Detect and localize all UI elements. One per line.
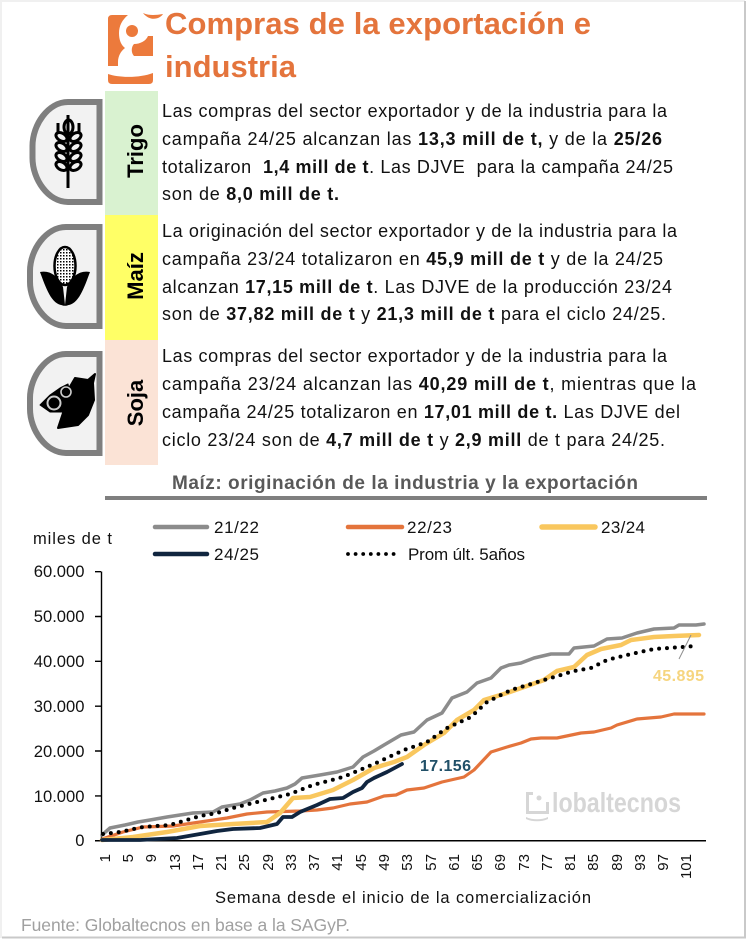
text: soja: campaña 24/25 totalizaron en 17,01 mill de t. Las DJVE del: [162, 402, 680, 422]
panel: trigo: [32, 91, 673, 215]
series: 23/24: [102, 635, 699, 840]
y axis: 10.000: [34, 787, 84, 806]
data label: 45.895: 45.895: [653, 668, 704, 685]
x axis: 73: [516, 854, 533, 871]
x axis: 85: [585, 854, 602, 871]
logo: Globaltecnos g: [108, 13, 163, 84]
x axis: 77: [539, 854, 556, 871]
data label: 45.895: [653, 635, 704, 685]
y axis: 60.000: [34, 562, 84, 581]
label: Maíz: [105, 215, 158, 340]
series: 22/23: [102, 714, 704, 839]
label: Soja: Soja: [123, 379, 148, 426]
chart legend: 22/23: [407, 518, 452, 537]
x axis: [95, 841, 706, 879]
y axis: 0: [75, 831, 84, 850]
x axis: 29: [260, 854, 277, 871]
x axis: 45: [353, 854, 370, 871]
series: promedio 5 años: [103, 646, 696, 834]
y axis: 50.000: [34, 607, 84, 626]
x axis: 61: [446, 854, 463, 871]
chart legend: 23/24: [601, 518, 645, 537]
label: Maíz: Maíz: [123, 252, 148, 300]
label: Soja: [105, 340, 158, 465]
x axis: 53: [399, 854, 416, 871]
x axis: 41: [329, 854, 346, 871]
x axis: 33: [283, 854, 300, 871]
text: soja: campaña 23/24 alcanzan las 40,29 mill de t, mientras que la: [162, 374, 697, 394]
icon: soybean: [30, 354, 100, 453]
y axis: 40.000: [34, 652, 84, 671]
y axis unit: miles de t: [33, 530, 112, 548]
y axis: 30.000: [34, 697, 84, 716]
chart heading: Maíz: originación de la industria y la exportación: [172, 473, 638, 494]
x axis: 25: [236, 854, 253, 871]
x axis: 37: [306, 854, 323, 871]
icon: wheat: [32, 102, 100, 202]
text: maiz: campaña 23/24 totalizaron en 45,9 mill de t y de la 24/25: [162, 249, 663, 269]
data label: 17.156: 17.156: [420, 758, 471, 775]
panel: maiz: [30, 215, 678, 340]
chart legend: 21/22: [214, 518, 259, 537]
series: 21/22: [102, 624, 704, 835]
x axis: 57: [423, 854, 440, 871]
title: [165, 6, 591, 84]
x axis: 93: [632, 854, 649, 871]
text: soja: [162, 346, 697, 450]
text: soja: ciclo 23/24 son de 4,7 mill de t y 2,9 mill de t para 24/25.: [162, 430, 665, 450]
x axis: 13: [167, 854, 184, 871]
text: trigo: son de 8,0 mill de t.: [162, 184, 339, 204]
text: trigo: totalizaron 1,4 mill de t. Las DJVE para la campaña 24/25: [162, 157, 673, 177]
watermark: lobaltecnos: [552, 787, 681, 818]
text: soja: Las compras del sector exportador y de la industria para la: [162, 346, 668, 366]
x axis: 17: [190, 854, 207, 871]
chart legend: [155, 518, 645, 564]
x axis: 101: [678, 854, 695, 879]
text: trigo: campaña 24/25 alcanzan las 13,3 mill de t, y de la 25/26: [162, 129, 662, 149]
x axis: 49: [376, 854, 393, 871]
title: Compras de la exportación e: [165, 6, 591, 41]
text: trigo: Las compras del sector exportador y de la industria para la: [162, 101, 668, 121]
label: Trigo: Trigo: [123, 124, 148, 178]
chart legend: Prom últ. 5años: [408, 545, 525, 564]
x axis: 5: [120, 854, 137, 862]
text: maiz: alcanzan 17,15 mill de t. Las DJVE de la producción 23/24: [162, 277, 672, 297]
x axis: 9: [143, 854, 160, 862]
text: maiz: [162, 221, 678, 324]
x axis: 81: [562, 854, 579, 871]
y axis: [34, 562, 102, 850]
series: 24/25: [102, 764, 402, 840]
x axis: 1: [97, 854, 114, 862]
chart legend: 24/25: [214, 545, 259, 564]
watermark: [526, 787, 681, 821]
x axis: 89: [609, 854, 626, 871]
x axis: 21: [213, 854, 230, 871]
source note: Fuente: Globaltecnos en base a la SAGyP.: [21, 915, 350, 935]
x axis: 97: [655, 854, 672, 871]
x axis: 65: [469, 854, 486, 871]
line chart: [33, 518, 706, 907]
panel: soja: [30, 340, 697, 465]
text: maiz: La originación del sector exportador y de la industria para la: [162, 221, 678, 241]
text: trigo: [162, 101, 673, 204]
icon: corn: [30, 227, 100, 326]
text: maiz: son de 37,82 mill de t y 21,3 mill de t para el ciclo 24/25.: [162, 304, 666, 324]
y axis: 20.000: [34, 742, 84, 761]
x axis: 69: [492, 854, 509, 871]
label: Trigo: [105, 91, 158, 215]
chart heading: [105, 473, 707, 500]
x axis title: Semana desde el inicio de la comercialización: [215, 889, 591, 907]
title: industria: [165, 49, 297, 84]
